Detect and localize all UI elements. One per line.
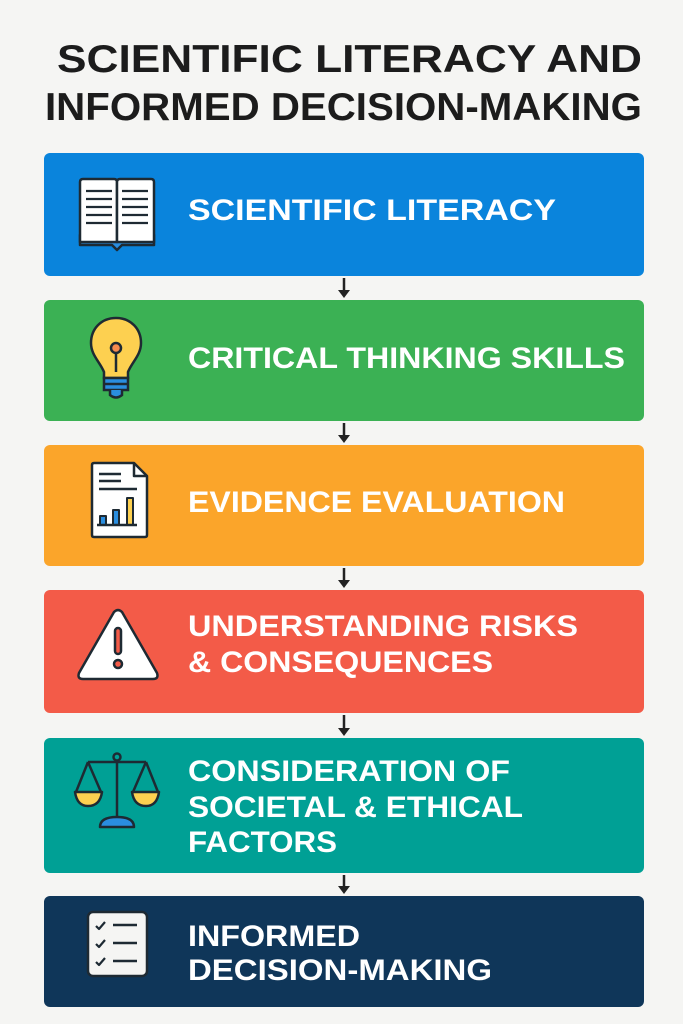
icon: open book	[80, 179, 154, 250]
title: INFORMED DECISION-MAKING	[45, 86, 642, 129]
icon: checklist	[88, 912, 147, 976]
arrow 2	[338, 423, 350, 443]
icon: warning	[78, 610, 158, 679]
title: SCIENTIFIC LITERACY AND	[57, 38, 642, 81]
arrow 3	[338, 568, 350, 588]
icon: document with chart	[92, 463, 147, 537]
panel: informed decision-making: DECISION-MAKING	[188, 954, 492, 987]
panel: critical thinking: CRITICAL THINKING SKILLS	[188, 342, 625, 375]
panel: risks: & CONSEQUENCES	[188, 646, 493, 679]
panel: evidence evaluation: EVIDENCE EVALUATION	[188, 486, 565, 519]
panel: risks: UNDERSTANDING RISKS	[188, 610, 578, 643]
arrow 5	[338, 875, 350, 894]
title	[45, 38, 642, 129]
panel: informed decision-making: INFORMED	[188, 920, 360, 953]
icon: lightbulb	[91, 318, 141, 398]
panel: societal ethical: CONSIDERATION OF	[188, 755, 510, 788]
panel: societal ethical	[44, 738, 644, 873]
panel: critical thinking	[44, 300, 644, 421]
arrow 1	[338, 278, 350, 298]
panel: scientific literacy	[44, 153, 644, 276]
panel: societal ethical: FACTORS	[188, 826, 337, 859]
panel: societal ethical: SOCIETAL & ETHICAL	[188, 791, 523, 824]
icon: scales	[75, 754, 159, 827]
panel: evidence evaluation	[44, 445, 644, 566]
panel: scientific literacy: SCIENTIFIC LITERACY	[188, 194, 556, 227]
arrow 4	[338, 715, 350, 736]
panel: informed decision-making	[44, 896, 644, 1007]
panel: risks	[44, 590, 644, 713]
